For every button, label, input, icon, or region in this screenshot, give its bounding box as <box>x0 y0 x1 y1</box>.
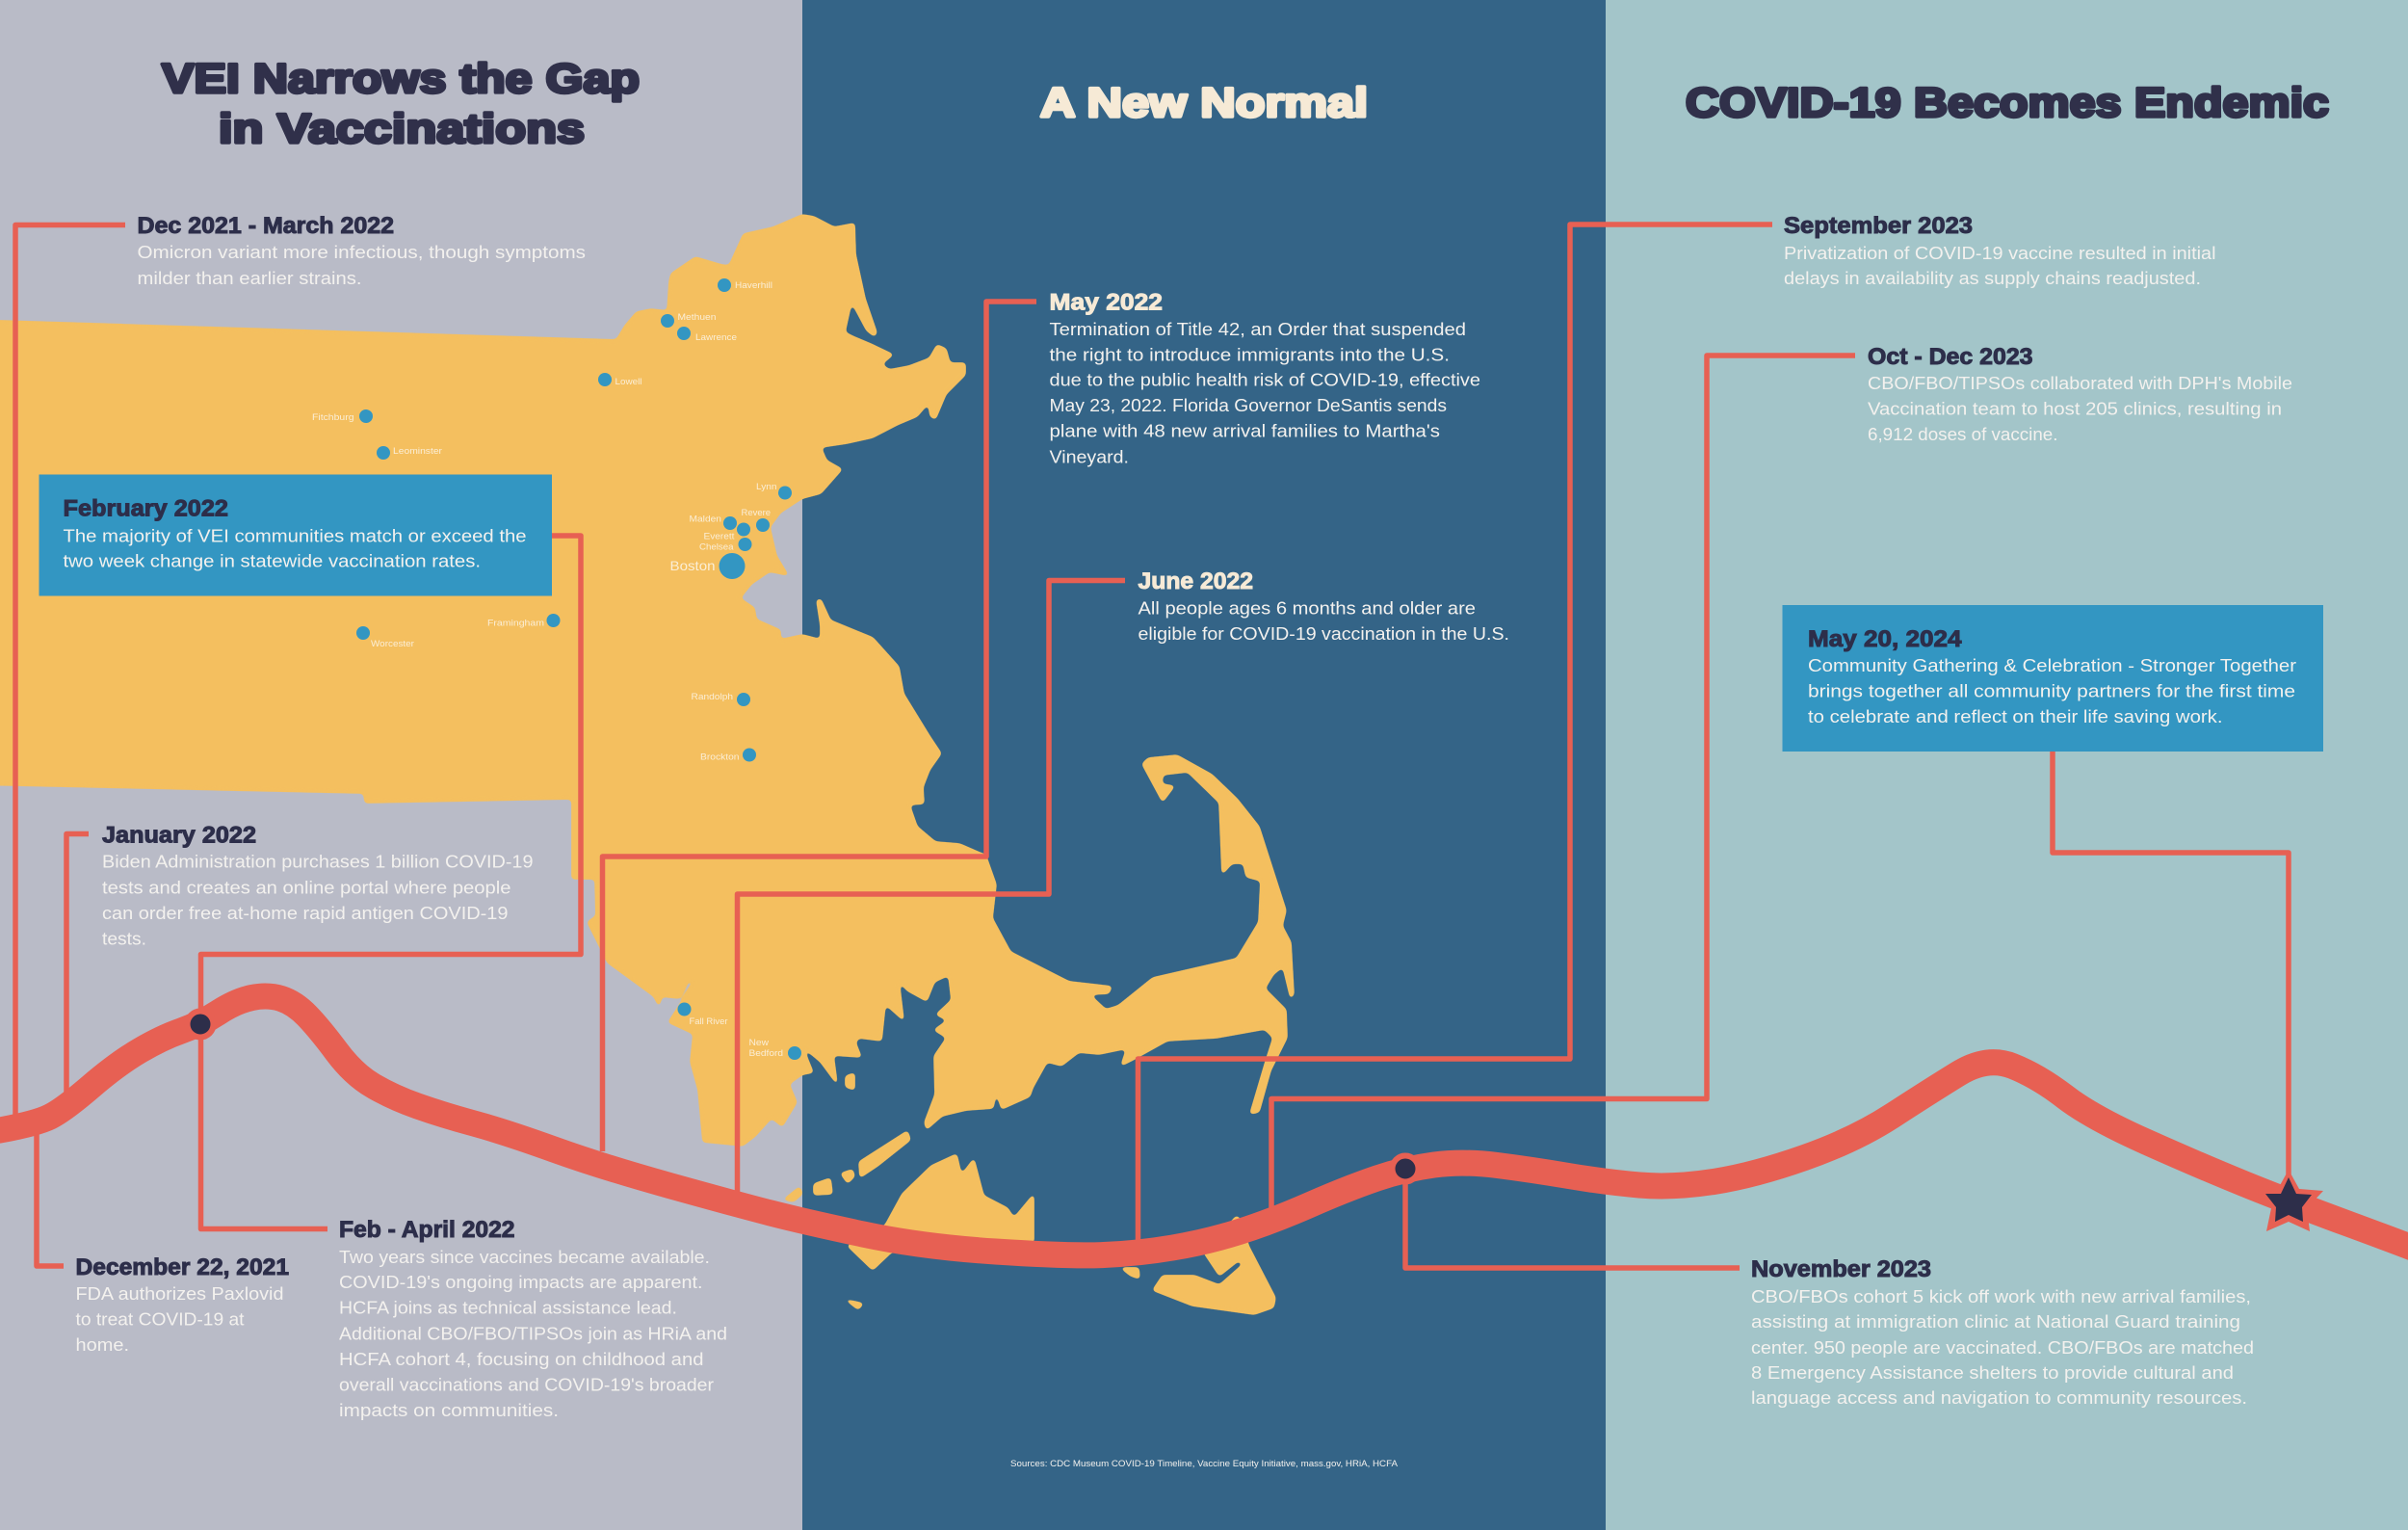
city markers and labels: Framingham <box>487 619 544 628</box>
event: Oct - Dec 2023: Oct - Dec 2023 <box>1868 344 2032 370</box>
event: January 2022: January 2022 <box>102 823 256 848</box>
event: January 2022 <box>102 823 534 948</box>
title: middle panel: A New Normal <box>1040 80 1368 126</box>
city markers and labels: Lawrence <box>695 332 737 343</box>
event: June 2022: June 2022 <box>1139 568 1253 594</box>
connector lines <box>15 224 2289 1268</box>
event: December 22, 2021: home. <box>75 1334 129 1355</box>
event: November 2023 <box>1751 1256 2254 1408</box>
callout: May 20, 2024: to celebrate and reflect on their life saving work. <box>1808 706 2223 726</box>
event: January 2022: can order free at-home rapid antigen COVID-19 <box>102 903 509 923</box>
city markers and labels: New <box>749 1038 769 1048</box>
event: Feb - April 2022: overall vaccinations and COVID-19's broader <box>339 1374 714 1395</box>
timeline marker: November 2023 <box>1393 1156 1418 1181</box>
title: left panel: in Vaccinations <box>219 106 585 152</box>
city markers and labels: Everett <box>703 532 735 541</box>
city markers and labels: Lowell <box>615 377 641 387</box>
city markers and labels: Fitchburg <box>312 412 354 423</box>
city markers and labels: Leominster <box>393 446 442 457</box>
event: Oct - Dec 2023 <box>1868 344 2292 444</box>
event: June 2022 <box>1139 568 1509 644</box>
timeline marker: early 2022 <box>187 1012 214 1037</box>
event: Dec 2021 - March 2022 <box>137 213 586 288</box>
event: November 2023: center. 950 people are vaccinated. CBO/FBOs are matched <box>1751 1337 2254 1358</box>
callout: February 2022: The majority of VEI communities match or exceed the <box>64 526 526 545</box>
callout: May 20, 2024: brings together all community partners for the first time <box>1808 680 2295 701</box>
event: December 22, 2021: to treat COVID-19 at <box>75 1308 245 1330</box>
event: Feb - April 2022: HCFA joins as technical assistance lead. <box>339 1297 677 1318</box>
city markers and labels: Worcester <box>371 639 414 649</box>
event: May 2022: plane with 48 new arrival families to Martha's <box>1050 420 1440 441</box>
event: June 2022: eligible for COVID-19 vaccination in the U.S. <box>1139 623 1509 644</box>
event: December 22, 2021: December 22, 2021 <box>75 1254 289 1280</box>
city markers and labels: Chelsea <box>699 541 734 553</box>
event: Feb - April 2022 <box>339 1217 727 1420</box>
event: September 2023: delays in availability as supply chains readjusted. <box>1784 268 2201 288</box>
city markers and labels: Revere <box>742 508 771 518</box>
callout: February 2022: February 2022 <box>64 495 228 522</box>
event: Oct - Dec 2023: Vaccination team to host 205 clinics, resulting in <box>1868 399 2282 418</box>
event: November 2023: language access and navigation to community resources. <box>1751 1387 2247 1408</box>
title: right panel: COVID-19 Becomes Endemic <box>1686 80 2329 126</box>
city markers and labels: Fall River <box>690 1016 728 1027</box>
event: December 22, 2021: FDA authorizes Paxlovid <box>75 1283 283 1304</box>
event: September 2023 <box>1784 213 2215 288</box>
panel: left background <box>0 0 802 1530</box>
event: May 2022: the right to introduce immigrants into the U.S. <box>1050 345 1450 364</box>
title: left panel <box>162 56 640 152</box>
event: Feb - April 2022: Feb - April 2022 <box>339 1217 514 1243</box>
panel: right background <box>1606 0 2408 1530</box>
event: January 2022: Biden Administration purchases 1 billion COVID-19 <box>102 852 534 871</box>
event: May 2022: May 23, 2022. Florida Governor DeSantis sends <box>1050 395 1447 415</box>
event: September 2023: September 2023 <box>1784 213 1973 239</box>
city markers and labels: Methuen <box>678 312 717 323</box>
event: January 2022: tests. <box>102 929 146 948</box>
event: June 2022: All people ages 6 months and older are <box>1139 597 1476 619</box>
city markers and labels <box>312 278 801 1060</box>
event: May 2022 <box>1050 289 1480 466</box>
city markers and labels: Haverhill <box>735 280 772 291</box>
event: Dec 2021 - March 2022: milder than earlier strains. <box>137 268 362 288</box>
event: September 2023: Privatization of COVID-19 vaccine resulted in initial <box>1784 243 2215 263</box>
event: Dec 2021 - March 2022: Omicron variant more infectious, though symptoms <box>137 242 586 262</box>
event: November 2023: 8 Emergency Assistance shelters to provide cultural and <box>1751 1362 2234 1383</box>
event: November 2023: CBO/FBOs cohort 5 kick off work with new arrival families, <box>1751 1286 2251 1306</box>
event: Feb - April 2022: Two years since vaccines became available. <box>339 1247 710 1267</box>
city markers and labels: Randolph <box>692 692 733 702</box>
event: Dec 2021 - March 2022: Dec 2021 - March 2022 <box>137 213 394 239</box>
event: Oct - Dec 2023: 6,912 doses of vaccine. <box>1868 424 2057 444</box>
callout: May 20, 2024: May 20, 2024 <box>1808 626 1962 652</box>
event: December 22, 2021 <box>75 1254 289 1355</box>
event: Feb - April 2022: impacts on communities. <box>339 1400 559 1420</box>
city markers and labels: Lynn <box>756 482 776 492</box>
city markers and labels: Bedford <box>749 1048 783 1059</box>
map of Massachusetts <box>0 215 1294 1314</box>
event: January 2022: tests and creates an online portal where people <box>102 877 510 898</box>
callout: May 20, 2024: Community Gathering & Celebration - Stronger Together <box>1808 655 2296 675</box>
event: May 2022: May 2022 <box>1050 289 1163 316</box>
callout: February 2022: two week change in statewide vaccination rates. <box>64 551 481 570</box>
event: May 2022: Termination of Title 42, an Order that suspended <box>1050 319 1466 339</box>
event: November 2023: November 2023 <box>1751 1256 1931 1282</box>
callout: February 2022 <box>39 474 552 595</box>
panel: middle background <box>802 0 1606 1530</box>
sources note: Sources: CDC Museum COVID-19 Timeline, Vaccine Equity Initiative, mass.gov, HRiA, HCFA <box>1010 1459 1399 1469</box>
city markers and labels: Boston <box>670 558 715 573</box>
event: Feb - April 2022: Additional CBO/FBO/TIPSOs join as HRiA and <box>339 1324 727 1343</box>
event: May 2022: Vineyard. <box>1050 447 1129 466</box>
timeline marker: star May 2024 <box>2256 1170 2323 1231</box>
event: Oct - Dec 2023: CBO/FBO/TIPSOs collaborated with DPH's Mobile <box>1868 373 2292 393</box>
event: Feb - April 2022: HCFA cohort 4, focusing on childhood and <box>339 1349 703 1369</box>
callout: May 20, 2024 <box>1782 605 2323 752</box>
city markers and labels: Malden <box>690 514 721 524</box>
event: May 2022: due to the public health risk of COVID-19, effective <box>1050 370 1480 389</box>
title: left panel: VEI Narrows the Gap <box>162 56 640 102</box>
timeline wave <box>0 996 2408 1257</box>
city markers and labels: Brockton <box>700 752 740 763</box>
event: November 2023: assisting at immigration clinic at National Guard training <box>1751 1311 2240 1332</box>
event: Feb - April 2022: COVID-19's ongoing impacts are apparent. <box>339 1272 703 1292</box>
